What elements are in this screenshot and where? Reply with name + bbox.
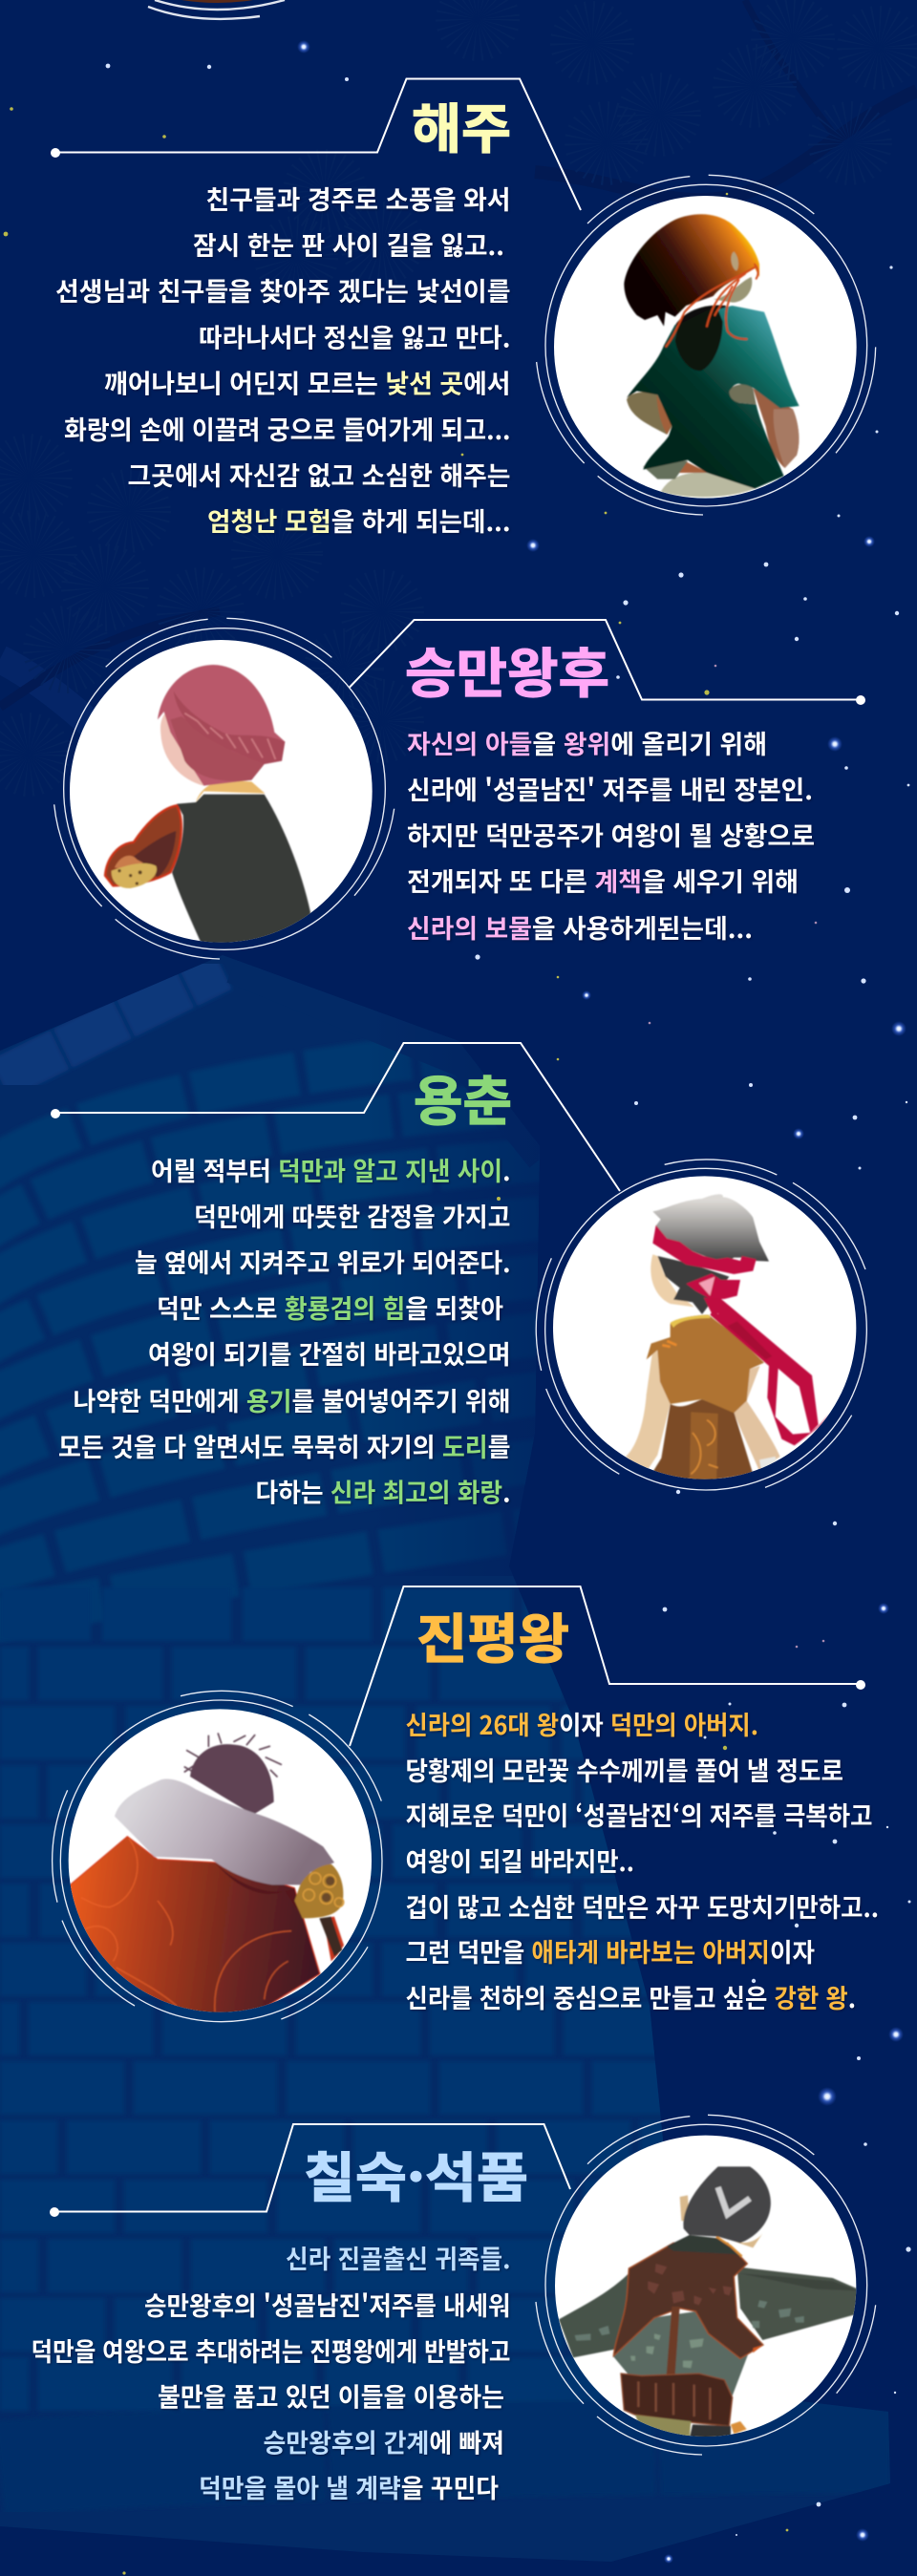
text block: 승만왕후 description: 자신의 아들을 왕위에 올리기 위해 <box>407 724 767 761</box>
background: stone fortress tower <box>0 946 917 2569</box>
text block: 칠숙·석품 description <box>31 2239 510 2505</box>
heading: 진평왕: 진평왕 <box>416 1597 569 1674</box>
text block: 용춘 description: 늘 옆에서 지켜주고 위로가 되어준다. <box>135 1243 510 1280</box>
text block: 진평왕 description <box>405 1705 879 2015</box>
figure: youth with red headband <box>626 1194 829 1483</box>
text block: 진평왕 description: 당황제의 모란꽃 수수께끼를 풀어 낼 정도로 <box>405 1751 843 1788</box>
text block: 승만왕후 description: 하지만 덕만공주가 여왕이 될 상황으로 <box>407 816 815 853</box>
text block: 승만왕후 description: 신라의 보물을 사용하게된는데... <box>407 908 753 946</box>
figure: king with orange cape and fur collar <box>69 1734 344 2018</box>
portrait: 승만왕후 <box>54 618 395 959</box>
text block: 용춘 description: 나약한 덕만에게 용기를 불어넣어주기 위해 <box>73 1381 510 1418</box>
rings <box>53 1691 382 2022</box>
text block: 용춘 description: 덕만 스스로 황룡검의 힘을 되찾아 <box>157 1288 503 1326</box>
text block: 해주 description: 깨어나보니 어딘지 모르는 낯선 곳에서 <box>104 363 510 401</box>
figure: noble with leather vest <box>559 2166 858 2438</box>
portrait: 해주 <box>537 175 876 515</box>
heading frame: 해주 <box>51 78 581 210</box>
figure: girl with teal tunic <box>624 214 800 497</box>
text block: 칠숙·석품 description: 승만왕후의 '성골남진'저주를 내세워 <box>144 2286 510 2323</box>
heading frame: 용춘 <box>51 1043 620 1191</box>
text block: 진평왕 description: 겁이 많고 소심한 덕만은 자꾸 도망치기만하고.. <box>405 1887 879 1925</box>
text block: 칠숙·석품 description: 덕만을 여왕으로 추대하려는 진평왕에게 반발하고 <box>31 2331 510 2369</box>
text block: 칠숙·석품 description: 덕만을 몰아 낼 계략을 꾸민다 <box>199 2468 499 2505</box>
figure: queen with braided pink hair <box>105 665 310 948</box>
text block: 해주 description: 화랑의 손에 이끌려 궁으로 들어가게 되고... <box>64 410 510 447</box>
heading frame: 승만왕후 <box>350 620 865 705</box>
text block: 승만왕후 description: 전개되자 또 다른 계책을 세우기 위해 <box>407 862 799 899</box>
text block: 진평왕 description: 지혜로운 덕만이 ‘성골남진‘의 저주를 극복하고 <box>405 1796 873 1833</box>
section: 진평왕 <box>53 1586 879 2022</box>
text block: 용춘 description: 어릴 적부터 덕만과 알고 지낸 사이. <box>151 1151 510 1188</box>
text block: 해주 description: 친구들과 경주로 소풍을 와서 <box>206 180 510 217</box>
text block: 칠숙·석품 description: 불만을 품고 있던 이들을 이용하는 <box>158 2376 504 2415</box>
text block: 용춘 description: 덕만에게 따뜻한 감정을 가지고 <box>194 1197 510 1234</box>
background: pine branches <box>0 0 917 842</box>
heading frame: 진평왕 <box>350 1586 865 1746</box>
portrait: 칠숙·석품 <box>536 2115 876 2455</box>
rings <box>54 618 395 959</box>
rings <box>537 175 876 515</box>
text block: 해주 description <box>55 180 510 539</box>
text block: 진평왕 description: 신라의 26대 왕이자 덕만의 아버지. <box>405 1705 758 1742</box>
text block: 용춘 description: 여왕이 되기를 간절히 바라고있으며 <box>148 1334 510 1372</box>
text block: 칠숙·석품 description: 승만왕후의 간계에 빠져 <box>264 2422 504 2460</box>
text block: 해주 description: 그곳에서 자신감 없고 소심한 해주는 <box>128 456 510 493</box>
text block: 해주 description: 선생님과 친구들을 찾아주 겠다는 낯선이를 <box>55 271 510 309</box>
portrait: 용춘 <box>536 1160 866 1490</box>
rings <box>536 2115 876 2455</box>
heading: 칠숙·석품: 칠숙·석품 <box>304 2136 528 2213</box>
section: 용춘 <box>51 1043 866 1509</box>
heading frame: 칠숙·석품 <box>50 2124 570 2217</box>
text block: 해주 description: 잠시 한눈 판 사이 길을 잃고.. <box>193 225 504 263</box>
text block: 용춘 description: 모든 것을 다 알면서도 묵묵히 자기의 도리를 <box>58 1427 510 1464</box>
text block: 진평왕 description: 신라를 천하의 중심으로 만들고 싶은 강한 왕. <box>405 1978 856 2015</box>
top fragment of previous portrait <box>148 0 285 19</box>
text block: 해주 description: 엄청난 모험을 하게 되는데... <box>207 501 510 539</box>
text block: 용춘 description: 다하는 신라 최고의 화랑. <box>256 1473 511 1509</box>
heading: 해주: 해주 <box>412 87 511 164</box>
heading: 용춘: 용춘 <box>414 1059 512 1137</box>
section: 칠숙·석품 <box>31 2115 876 2505</box>
text block: 해주 description: 따라나서다 정신을 잃고 만다. <box>199 317 510 355</box>
section: 승만왕후 <box>54 618 865 959</box>
heading: 승만왕후: 승만왕후 <box>405 631 609 709</box>
section: 해주 <box>51 78 876 539</box>
rings <box>536 1160 866 1490</box>
text block: 칠숙·석품 description: 신라 진골출신 귀족들. <box>286 2239 510 2276</box>
text block: 진평왕 description: 그런 덕만을 애타게 바라보는 아버지이자 <box>405 1932 815 1969</box>
text block: 용춘 description <box>58 1151 511 1509</box>
portrait: 진평왕 <box>53 1691 382 2022</box>
text block: 진평왕 description: 여왕이 되길 바라지만.. <box>405 1842 634 1879</box>
text block: 승만왕후 description <box>407 724 815 946</box>
text block: 승만왕후 description: 신라에 '성골남진' 저주를 내린 장본인. <box>407 770 813 807</box>
